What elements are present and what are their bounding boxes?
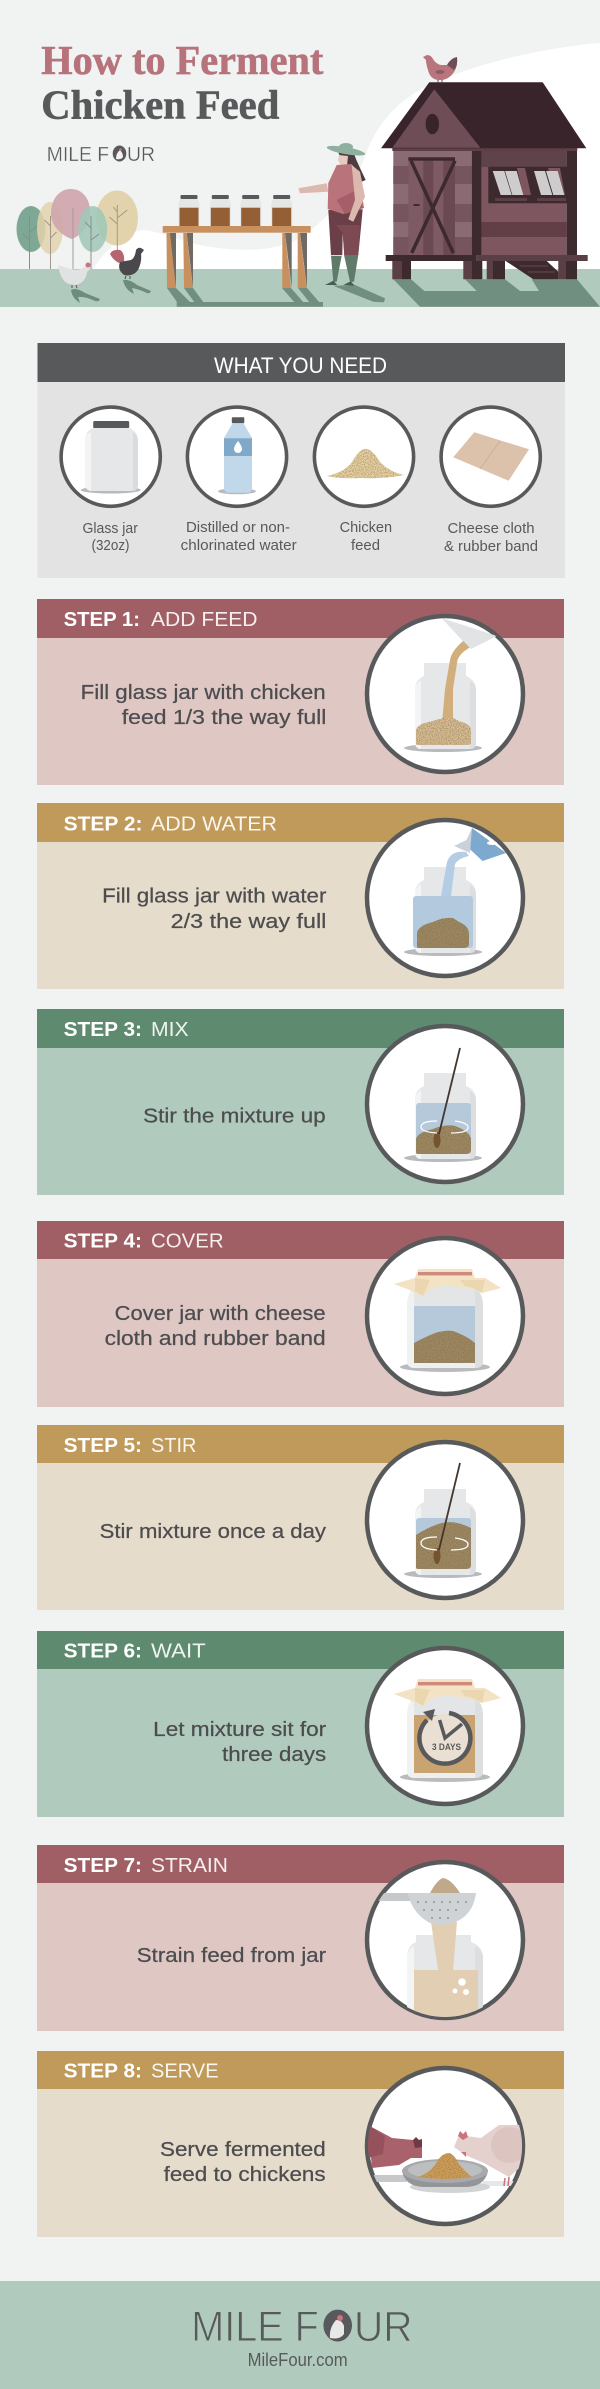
step 7 heading [64, 1855, 228, 1877]
icon: chicken feed [314, 407, 414, 506]
labels: Distilled or non- [186, 520, 290, 536]
title [41, 37, 324, 128]
labels: Glass jar [82, 521, 138, 537]
logo: Mile Four bottom: MILE F [191, 2304, 319, 2351]
step 3 illustration [367, 1026, 523, 1182]
step 3 heading: MIX [151, 1019, 189, 1041]
labels: feed [351, 538, 380, 554]
step 7 illustration [367, 1862, 523, 2020]
step 1 text: feed 1/3 the way full [122, 707, 326, 729]
step 7 heading: STEP 7: [64, 1855, 142, 1877]
step 5 heading [64, 1435, 196, 1457]
step 6 illustration [367, 1648, 523, 1804]
step 6 text: Let mixture sit for [153, 1719, 327, 1741]
logo: Mile Four top: MILE F [47, 143, 109, 166]
step 5 heading: STIR [151, 1435, 196, 1457]
step 8 heading [64, 2060, 219, 2082]
step 1 text: Fill glass jar with chicken [81, 682, 326, 704]
heading: what you need [38, 343, 565, 382]
step 8 text: Serve fermented [160, 2139, 326, 2161]
step 5 text: Stir mixture once a day [100, 1521, 326, 1543]
step 3 text: Stir the mixture up [143, 1106, 326, 1128]
step 1 text [81, 682, 326, 729]
windows [488, 167, 567, 203]
step 2 heading: ADD WATER [151, 814, 277, 836]
step 7 text: Strain feed from jar [137, 1945, 326, 1967]
roof [381, 82, 586, 148]
white hill backdrop [93, 43, 600, 269]
logo: Mile Four bottom [191, 2304, 412, 2351]
icon: cheese cloth [441, 407, 540, 506]
step 2 text: Fill glass jar with water [102, 886, 327, 908]
labels: Chicken [340, 520, 392, 536]
chicken coop [381, 82, 588, 279]
ground strip [0, 269, 600, 307]
labels: Cheese cloth [448, 521, 534, 537]
step 2 text: 2/3 the way full [171, 911, 326, 933]
step 2 heading: STEP 2: [64, 814, 142, 836]
step 4 heading: STEP 4: [64, 1230, 142, 1252]
coop legs [392, 261, 566, 279]
gable vent [426, 114, 439, 134]
step 2 illustration [367, 820, 523, 976]
step 6 illustration: 3 DAYS [432, 1742, 461, 1753]
logo: Mile Four bottom: O [323, 2304, 352, 2351]
labels [82, 520, 538, 555]
title: Chicken Feed [41, 82, 279, 128]
step 4 text: Cover jar with cheese [115, 1303, 326, 1325]
step 8 text [160, 2139, 326, 2186]
door [408, 157, 455, 255]
jars on table [178, 195, 292, 226]
coop shadow [393, 279, 600, 307]
step 6 text [153, 1719, 327, 1766]
step 1 heading [64, 609, 257, 631]
website: MileFour.com [248, 2350, 348, 2370]
heading: what you need: WHAT YOU NEED [214, 353, 387, 378]
table [163, 226, 311, 288]
panel: step 7 [37, 1845, 564, 2031]
step 8 heading: SERVE [151, 2060, 219, 2082]
step 5 heading: STEP 5: [64, 1435, 142, 1457]
dark chicken [110, 248, 151, 294]
logo: Mile Four top: UR [127, 143, 155, 166]
icon: water bottle [187, 407, 287, 506]
labels: & rubber band [444, 539, 538, 555]
right wall [482, 150, 567, 255]
panel: step 6 [37, 1631, 564, 1817]
panel: step 3 [37, 1009, 564, 1195]
hen on roof [423, 55, 457, 82]
step 7 heading: STRAIN [151, 1855, 228, 1877]
step 6 text: three days [222, 1744, 326, 1766]
panel: step 5 [37, 1425, 564, 1610]
hero scene [0, 43, 600, 307]
step 2 text [102, 886, 327, 933]
step 6 heading [64, 1640, 206, 1662]
floor [386, 255, 477, 261]
panel: step 1 [37, 599, 564, 785]
posts [472, 148, 577, 255]
labels: chlorinated water [181, 538, 297, 554]
step 1 illustration [367, 616, 523, 772]
icon: glass jar [61, 407, 160, 506]
ramp [506, 261, 558, 279]
logo: Mile Four bottom: UR [354, 2304, 412, 2351]
step 4 illustration [367, 1238, 523, 1394]
panel: step 2 [37, 803, 564, 989]
step 8 illustration [367, 2068, 527, 2224]
step 4 text: cloth and rubber band [105, 1328, 326, 1350]
step 4 text [105, 1303, 326, 1350]
step 6 heading: STEP 6: [64, 1640, 142, 1662]
title: How to Ferment [41, 37, 324, 83]
logo: Mile Four top: O [113, 143, 126, 166]
gable [392, 89, 480, 148]
step 2 heading [64, 814, 277, 836]
panel: step 4 [37, 1221, 564, 1407]
step 1 heading: ADD FEED [151, 609, 258, 631]
panel: step 8 [37, 2051, 564, 2237]
step 5 illustration [367, 1442, 523, 1598]
table shadow [167, 288, 323, 307]
step 1 heading: STEP 1: [64, 609, 140, 631]
white chicken [58, 262, 100, 303]
step 3 heading [64, 1019, 189, 1041]
woman [298, 143, 385, 302]
step 4 heading [64, 1230, 224, 1252]
step 4 heading: COVER [151, 1230, 224, 1252]
step 6 heading: WAIT [151, 1640, 206, 1662]
step 8 heading: STEP 8: [64, 2060, 142, 2082]
step 8 text: feed to chickens [164, 2164, 326, 2186]
left wall [393, 150, 472, 255]
trees [16, 189, 138, 269]
labels: (32oz) [92, 538, 130, 554]
step 3 heading: STEP 3: [64, 1019, 142, 1041]
footer [0, 2281, 600, 2389]
logo: Mile Four top [47, 143, 155, 166]
panel: what you need [38, 343, 565, 578]
